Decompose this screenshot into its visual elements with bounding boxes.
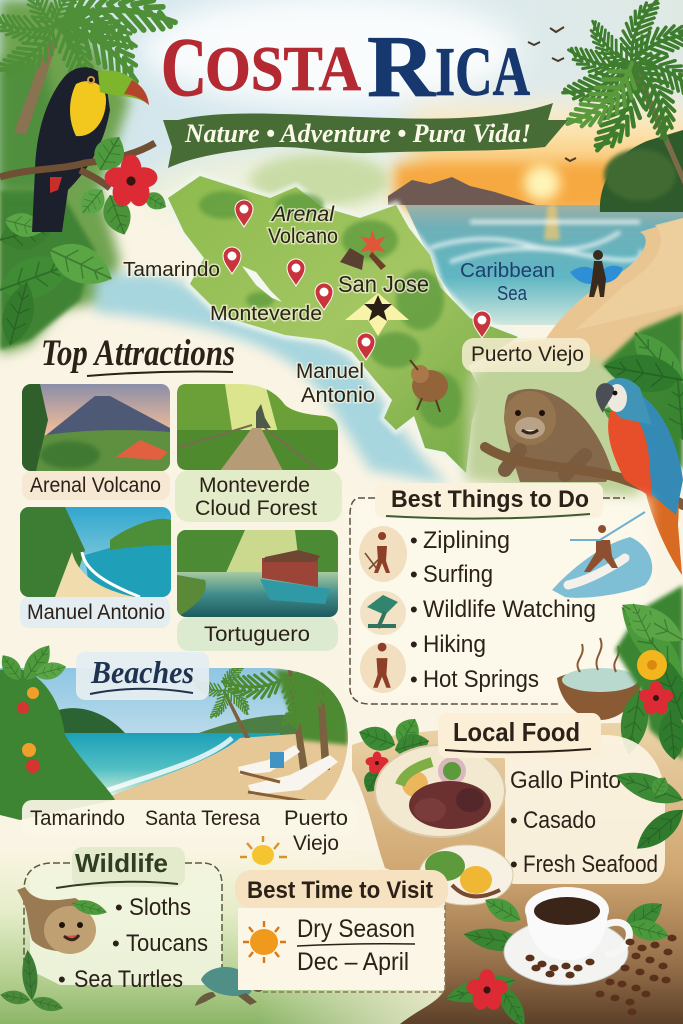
wildlife list: Sloths [129, 894, 191, 921]
panel: wildlife [0, 847, 264, 1015]
leaves by plate [355, 713, 432, 797]
icon: hiking [360, 643, 406, 693]
wildlife list [58, 894, 208, 993]
right palm tree [562, 0, 683, 185]
season text: Dry Season [297, 915, 415, 943]
beach names: Puerto [284, 807, 348, 830]
map labels: Caribbean [460, 260, 555, 282]
map labels: Volcano [268, 225, 338, 248]
activities list: Hiking [423, 631, 486, 658]
macaw [596, 378, 683, 575]
heading: local food [438, 713, 601, 758]
star [364, 295, 392, 321]
beach names: Viejo [293, 832, 339, 855]
photo: monteverde cloud forest [177, 384, 338, 471]
food list: Fresh Seafood [523, 851, 658, 878]
photo: arenal volcano [22, 384, 170, 471]
heading: wildlife [56, 847, 185, 888]
sea [405, 205, 683, 325]
label: manuel antonio: Manuel Antonio [27, 601, 165, 624]
birds [528, 27, 576, 161]
map labels: Monteverde [210, 303, 322, 325]
right foliage lower with flowers [611, 585, 683, 761]
lake [242, 266, 282, 302]
label: monteverde cloud forest: Cloud Forest [195, 497, 317, 520]
icon: sea turtle [195, 967, 264, 1006]
heading: best things to do [375, 483, 603, 519]
right foliage [599, 312, 683, 470]
branch [485, 447, 683, 505]
food list: • [510, 808, 518, 833]
heading: beaches: Beaches [90, 654, 194, 690]
title: C [161, 21, 207, 114]
cup [525, 887, 629, 960]
mossy background behind the sloth [465, 352, 640, 500]
coffee beans [525, 935, 677, 1015]
label: puerto viejo [462, 338, 590, 372]
caribbean surfer [570, 250, 623, 297]
map pins [223, 200, 491, 360]
wood table [352, 722, 683, 1024]
food list [510, 767, 658, 878]
hibiscus and leaves [74, 130, 170, 239]
sloth on branch [504, 389, 612, 482]
food list: Casado [523, 807, 596, 834]
big jungle leaves [0, 209, 119, 349]
activities list: • [410, 528, 418, 553]
left palm tree [0, 0, 176, 135]
small plant bottom-left [0, 950, 65, 1015]
label: monteverde cloud forest: Monteverde [199, 474, 310, 497]
hot spring bowl [557, 638, 642, 720]
sun loungers [238, 745, 338, 802]
coffee scene [442, 887, 677, 1024]
heading: local food: Local Food [453, 717, 580, 747]
title [161, 19, 530, 116]
label: monteverde cloud forest [175, 470, 342, 522]
icon: zipline [359, 526, 407, 582]
wildlife list: • [112, 931, 120, 956]
activities list: • [410, 667, 418, 692]
coffee leaves [442, 891, 671, 1024]
heading: wildlife: Wildlife [75, 848, 168, 878]
title: OSTA [205, 33, 361, 104]
heading: top attractions: Top Attractions [41, 333, 235, 374]
panel: local food [355, 713, 683, 905]
beach names [22, 800, 357, 855]
small map illustrations [340, 230, 386, 270]
heading: best time to visit [235, 870, 448, 908]
panel: best time to visit [235, 870, 448, 992]
map labels: Arenal [270, 203, 335, 226]
beach photo [0, 668, 348, 800]
photo: tortuguero [177, 530, 338, 617]
panel: best things to do [350, 483, 652, 720]
label: tortuguero [177, 617, 338, 651]
sun [524, 165, 560, 201]
small map animal [410, 360, 448, 412]
map labels: Manuel [296, 360, 364, 383]
san jose highlight [345, 293, 409, 336]
saucer [504, 919, 628, 985]
icon: sun [243, 921, 286, 963]
food list: • [510, 852, 518, 877]
activities list: Ziplining [423, 527, 510, 554]
wildlife list: • [115, 895, 123, 920]
left jungle background [0, 0, 130, 355]
left flowering foliage [0, 640, 115, 820]
west coast water [95, 273, 450, 485]
icon: wildlife watching [360, 591, 406, 635]
map labels: Tamarindo [123, 259, 220, 281]
activities list: Hot Springs [423, 666, 539, 693]
map labels: San Jose [338, 271, 429, 297]
activities list [410, 527, 596, 693]
icon: small sun [240, 836, 287, 865]
season text: Dec – April [297, 948, 409, 976]
title: ICA [435, 34, 530, 111]
side plate [419, 845, 513, 905]
map labels: Antonio [301, 384, 375, 407]
activities list: • [410, 632, 418, 657]
icon: sloth [17, 887, 108, 954]
food list: Gallo Pinto [510, 767, 621, 794]
label: arenal volcano: Arenal Volcano [30, 474, 161, 497]
main plate [375, 745, 505, 837]
activities list: Wildlife Watching [423, 596, 596, 623]
subtitle banner: Nature • Adventure • Pura Vida! [184, 119, 531, 148]
distant mountain [388, 177, 536, 205]
heading: best things to do: Best Things to Do [391, 486, 589, 513]
wildlife list: Toucans [126, 930, 208, 957]
right leaves [611, 764, 683, 857]
activities list: • [410, 562, 418, 587]
photo: manuel antonio [20, 507, 171, 597]
beach names: Tamarindo [30, 807, 125, 830]
map labels: Sea [497, 283, 528, 305]
tree line on the right [600, 130, 683, 212]
map of Costa Rica [168, 176, 518, 473]
season text [297, 915, 415, 976]
label: puerto viejo: Puerto Viejo [471, 343, 584, 366]
beach names: Santa Teresa [145, 807, 260, 830]
panel: beaches [0, 640, 365, 855]
toucan branch [0, 143, 155, 188]
wildlife list: • [58, 967, 66, 992]
map labels [123, 203, 590, 407]
boat [260, 550, 330, 604]
surfer illustration [552, 512, 652, 598]
panel: top attractions [20, 333, 342, 651]
subtitle banner [163, 103, 568, 168]
activities list: • [410, 597, 418, 622]
activities list: Surfing [423, 561, 493, 588]
palms [275, 670, 348, 745]
wildlife list: Sea Turtles [74, 966, 183, 993]
cream tray [500, 735, 665, 884]
beach [480, 218, 683, 370]
heading: beaches [76, 652, 209, 700]
title: R [367, 19, 437, 116]
heading: best time to visit: Best Time to Visit [247, 877, 433, 904]
label: tortuguero: Tortuguero [204, 623, 310, 646]
sunset sea and beach [388, 27, 683, 370]
toucan [32, 67, 149, 232]
